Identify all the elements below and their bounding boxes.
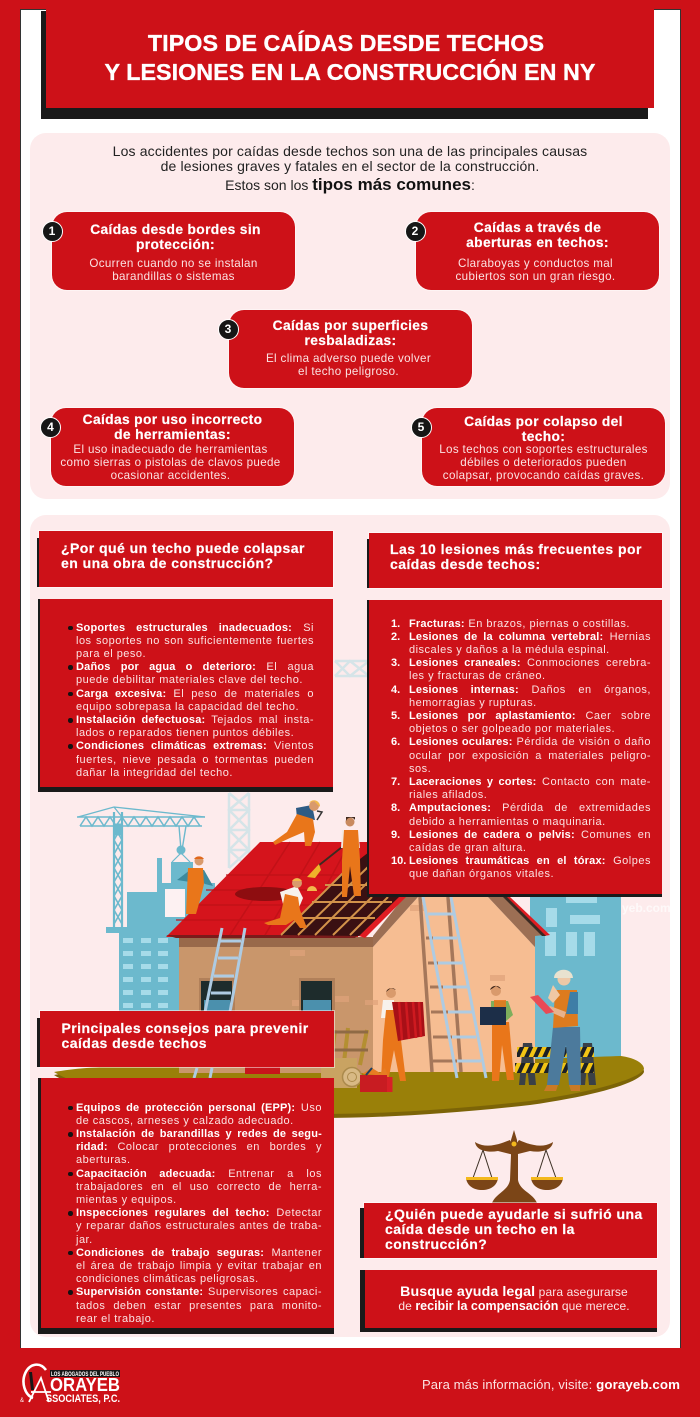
badge 5 xyxy=(410,416,432,438)
tips list: tados deben estar presentes para monito- xyxy=(76,1300,322,1312)
injuries list xyxy=(391,618,651,880)
card 5 body: colapsar, provocando caídas graves. xyxy=(443,468,644,482)
legal help text xyxy=(398,1284,630,1313)
logs and wood xyxy=(321,1028,368,1088)
tips list: ridad: Colocar protecciones en bordes y xyxy=(76,1141,322,1153)
tips list: y reparar daños estructurales antes de traba- xyxy=(76,1220,322,1232)
box plate xyxy=(41,1078,334,1328)
card 2 body: Claraboyas y conductos mal xyxy=(458,256,613,270)
banner shadow xyxy=(41,11,648,119)
heading text: ¿Por qué un techo puede colapsar xyxy=(61,540,305,556)
tips list: Supervisión constante: Supervisores capaci- xyxy=(76,1286,322,1298)
box: ayuda legal xyxy=(360,1270,657,1332)
box: causas de colapso xyxy=(38,599,333,792)
injuries list: hemorragias y rupturas. xyxy=(409,697,537,709)
illustration: house under construction xyxy=(54,660,670,1118)
causes list: Daños por agua o deterioro: El agua xyxy=(76,661,314,673)
card 1 body: barandillas o sistemas xyxy=(112,270,235,282)
causes list: los soportes no son suficientemente fuertes xyxy=(76,635,314,647)
box plate xyxy=(365,1270,657,1328)
right background building xyxy=(530,890,621,1062)
tips list: Condiciones de trabajo seguras: Mantener xyxy=(76,1247,322,1259)
box shadow xyxy=(360,1270,657,1332)
injuries list: Lesiones oculares: Pérdida de visión o daño xyxy=(409,736,651,748)
left accent xyxy=(37,1018,40,1067)
right ladder xyxy=(423,897,486,1078)
worker: carrying red tiles xyxy=(381,988,425,1082)
badge 4: 4 xyxy=(47,420,54,434)
box: lesiones: 10. xyxy=(391,855,406,867)
heading text xyxy=(62,1020,309,1051)
injuries list: Lesiones craneales: Conmociones cerebra- xyxy=(409,657,651,669)
tips list: el área de trabajo limpia y evitar trabajar en xyxy=(76,1260,322,1272)
badge 3 xyxy=(218,318,238,340)
card 4 body: El uso inadecuado de herramientas xyxy=(73,442,268,456)
tips list xyxy=(68,1102,322,1325)
tips list: de cascos, arneses y calzado adecuado. xyxy=(76,1115,294,1127)
legal help text: de recibir la compensación que merece. xyxy=(398,1299,630,1313)
heading: consejos xyxy=(40,1011,334,1067)
heading text: caídas desde techos xyxy=(62,1035,207,1051)
box: lesiones: 7. xyxy=(391,776,400,788)
worker: supervisor with clipboard xyxy=(530,970,581,1091)
injuries list: Lesiones por aplastamiento: Caer sobre xyxy=(409,710,651,722)
causes list: lados o reparados tienen puntos débiles. xyxy=(76,727,294,739)
left accent xyxy=(360,1208,364,1258)
causes list: Carga excesiva: El peso de materiales o xyxy=(76,688,314,700)
card 1: protección: xyxy=(136,236,215,252)
card 4 xyxy=(51,408,294,486)
badge 1 xyxy=(42,220,62,242)
injuries list: Fracturas: En brazos, piernas o costillas. xyxy=(409,618,630,630)
heading: 10 lesiones xyxy=(369,533,662,588)
intro text xyxy=(113,143,587,194)
injuries list: sos. xyxy=(409,763,431,775)
box plate xyxy=(40,599,333,787)
badge 5: 5 xyxy=(418,420,424,434)
card 4 body: como sierras o pistolas de clavos puede xyxy=(60,456,281,468)
injuries list: caídas de gran altura. xyxy=(409,842,526,854)
tips list: Capacitación adecuada: Entrenar a los xyxy=(76,1168,322,1180)
tips list: mientas y equipos. xyxy=(76,1194,177,1206)
card 5: techo: xyxy=(522,428,565,444)
card 2: aberturas en techos: xyxy=(466,234,609,250)
card 2 title: Caídas a través de xyxy=(474,220,601,234)
box shadow xyxy=(38,1078,334,1334)
badge 1: 1 xyxy=(49,224,55,238)
worker: standing with broom xyxy=(307,817,361,897)
box: lesiones: 1. xyxy=(391,618,400,630)
injuries list: objetos o ser golpeado por materiales. xyxy=(409,723,615,735)
injuries list: discales y daños a la médula espinal. xyxy=(409,644,610,656)
box: lesiones: 4. xyxy=(391,684,400,696)
left background building xyxy=(119,858,215,1012)
card 5 title: Caídas por colapso del xyxy=(464,414,623,428)
injuries list: les y fracturas de cráneo. xyxy=(409,670,546,682)
injuries list: riales afilados. xyxy=(409,789,487,801)
card 5 title xyxy=(464,414,623,444)
box: lesiones: 8. xyxy=(391,802,400,814)
causes list: puede debilitar materiales clave del techo. xyxy=(76,674,303,686)
card 4 body: ocasionar accidentes. xyxy=(111,468,230,482)
box: lesiones: 6. xyxy=(391,736,400,748)
card 3 title: Caídas por superficies xyxy=(273,318,428,332)
tips list: rear el trabajo. xyxy=(76,1313,155,1325)
box: lesiones: 3. xyxy=(391,657,400,669)
worker: carrying dark box xyxy=(480,986,514,1081)
heading text: Las 10 lesiones más frecuentes por xyxy=(390,541,642,557)
causes list xyxy=(68,622,314,779)
causes list: Soportes estructurales inadecuados: Si xyxy=(76,622,314,634)
logo xyxy=(20,1363,120,1405)
causes list: para el peso. xyxy=(76,648,146,660)
box: lesiones: 9. xyxy=(391,829,400,841)
card 5 body xyxy=(439,442,648,482)
card 3 title xyxy=(273,318,428,348)
injuries list: Laceraciones y cortes: Contacto con mate- xyxy=(409,776,651,788)
heading text xyxy=(385,1206,643,1252)
card 2 xyxy=(416,212,659,290)
box shadow xyxy=(367,600,662,897)
heading text: caída desde un techo en la xyxy=(385,1221,575,1237)
card 5 body: Los techos con soportes estructurales xyxy=(439,442,648,456)
title banner xyxy=(41,9,654,119)
injuries list: que dañan órganos vitales. xyxy=(409,868,554,880)
banner red plate xyxy=(46,0,654,108)
causes list: Condiciones climáticas extremas: Vientos xyxy=(76,740,314,752)
injuries list: Lesiones internas: Daños en órganos, xyxy=(409,684,651,696)
heading text: construcción? xyxy=(385,1236,487,1252)
causes list: dañar la integridad del techo. xyxy=(76,767,233,779)
panel: tipos de caídas xyxy=(30,133,670,499)
injuries list: Lesiones traumáticas en el tórax: Golpes xyxy=(409,855,651,867)
card 1 title: Caídas desde bordes sin xyxy=(90,222,261,236)
card 3 body xyxy=(266,352,431,378)
footer link text: Para más información, visite: gorayeb.com xyxy=(422,1377,680,1392)
house windows xyxy=(199,978,335,1012)
logo: ORAYEB xyxy=(50,1375,120,1395)
card 1 body: Ocurren cuando no se instalan xyxy=(89,256,258,270)
tips list: Instalación de barandillas y redes de segu- xyxy=(76,1128,322,1140)
roof xyxy=(166,842,369,938)
injuries list: ocular por exposición a materiales peligro- xyxy=(409,750,651,762)
tips list: aberturas. xyxy=(76,1154,131,1166)
heading text: caídas desde techos: xyxy=(390,556,541,572)
tips list: trabajadores en el uso correcto de herra- xyxy=(76,1181,322,1193)
heading text xyxy=(390,541,642,572)
tips list: condiciones climáticas peligrosas. xyxy=(76,1273,259,1285)
card 4 title xyxy=(83,412,262,442)
card 4 title: Caídas por uso incorrecto xyxy=(83,412,262,426)
tips list: Inspecciones regulares del techo: Detectar xyxy=(76,1207,322,1219)
card 1 xyxy=(52,212,295,290)
badge 3: 3 xyxy=(225,322,231,336)
card 3 body: El clima adverso puede volver xyxy=(266,352,431,364)
exposed roof rafters xyxy=(280,852,406,938)
heading text: Principales consejos para prevenir xyxy=(62,1020,309,1036)
card 3 body: el techo peligroso. xyxy=(298,364,399,378)
box: lesiones: 2. xyxy=(391,631,400,643)
scaffold towers xyxy=(229,661,369,868)
intro text: Los accidentes por caídas desde techos son una de las principales causas xyxy=(113,143,587,159)
left ladder xyxy=(194,928,245,1078)
left accent xyxy=(366,539,369,588)
intro text: de lesiones graves y fatales en el sector de la construcción. xyxy=(161,158,539,174)
card 5 xyxy=(422,408,665,486)
card 3: resbaladizas: xyxy=(304,332,396,348)
box shadow xyxy=(38,599,333,792)
badge 2: 2 xyxy=(412,224,418,238)
panel: causas, lesiones y consejos xyxy=(30,515,670,1337)
heading text: en una obra de construcción? xyxy=(61,555,274,571)
card 2 body: cubiertos son un gran riesgo. xyxy=(456,270,615,282)
toolbox xyxy=(360,1068,392,1092)
causes list: equipo sobrepasa la capacidad del techo. xyxy=(76,701,299,713)
intro text: Estos son los tipos más comunes: xyxy=(225,175,475,194)
icon: scales of justice xyxy=(466,1130,563,1203)
worker: by the crane xyxy=(177,856,213,914)
heading text: ¿Quién puede ayudarle si sufrió una xyxy=(385,1206,643,1222)
box plate xyxy=(369,600,662,894)
causes list: fuertes, nieve pesada o tormentas pueden xyxy=(76,754,314,766)
ghost url fragment: yeb.com xyxy=(622,901,670,915)
worker: seated on the roof xyxy=(264,878,317,928)
card 3 xyxy=(229,310,472,388)
ground xyxy=(54,1056,644,1118)
brown ladder xyxy=(420,897,461,1072)
heading text xyxy=(61,540,305,571)
heading: quién puede ayudarle xyxy=(364,1203,657,1258)
left accent xyxy=(36,538,39,587)
injuries list: debido a herramientas o maquinaria. xyxy=(409,816,606,828)
logo: & xyxy=(20,1398,24,1404)
heading: por qué colapsa xyxy=(39,531,333,587)
causes list: Instalación defectuosa: Tejados mal insta- xyxy=(76,714,314,726)
injuries list: Amputaciones: Pérdida de extremidades xyxy=(409,802,651,814)
card 5 body: débiles o deteriorados pueden xyxy=(460,456,627,468)
card 2 body xyxy=(456,256,615,282)
card 4: de herramientas: xyxy=(114,426,231,442)
card 1 body xyxy=(89,256,258,282)
crane xyxy=(77,807,205,933)
box: consejos xyxy=(38,1078,334,1334)
box: lesiones xyxy=(367,600,662,897)
worker: kneeling on the roof xyxy=(273,800,322,846)
title text xyxy=(104,30,596,85)
card 2 title xyxy=(466,220,609,250)
box: lesiones: 5. xyxy=(391,710,400,722)
legal help text: Busque ayuda legal para asegurarse xyxy=(400,1284,628,1300)
injuries list: Lesiones de cadera o pelvis: Comunes en xyxy=(409,829,651,841)
tips list: Equipos de protección personal (EPP): Uso xyxy=(76,1102,322,1114)
card 4 body xyxy=(60,442,281,482)
injuries list: Lesiones de la columna vertebral: Hernias xyxy=(409,631,651,643)
title text: Y LESIONES EN LA CONSTRUCCIÓN EN NY xyxy=(104,59,596,85)
badge 4 xyxy=(40,416,61,438)
badge 2 xyxy=(404,220,426,242)
card 1 title xyxy=(90,222,261,252)
house walls xyxy=(179,897,550,1074)
title text: TIPOS DE CAÍDAS DESDE TECHOS xyxy=(148,30,544,56)
barrier xyxy=(515,1043,596,1085)
tips list: jar. xyxy=(76,1234,93,1246)
